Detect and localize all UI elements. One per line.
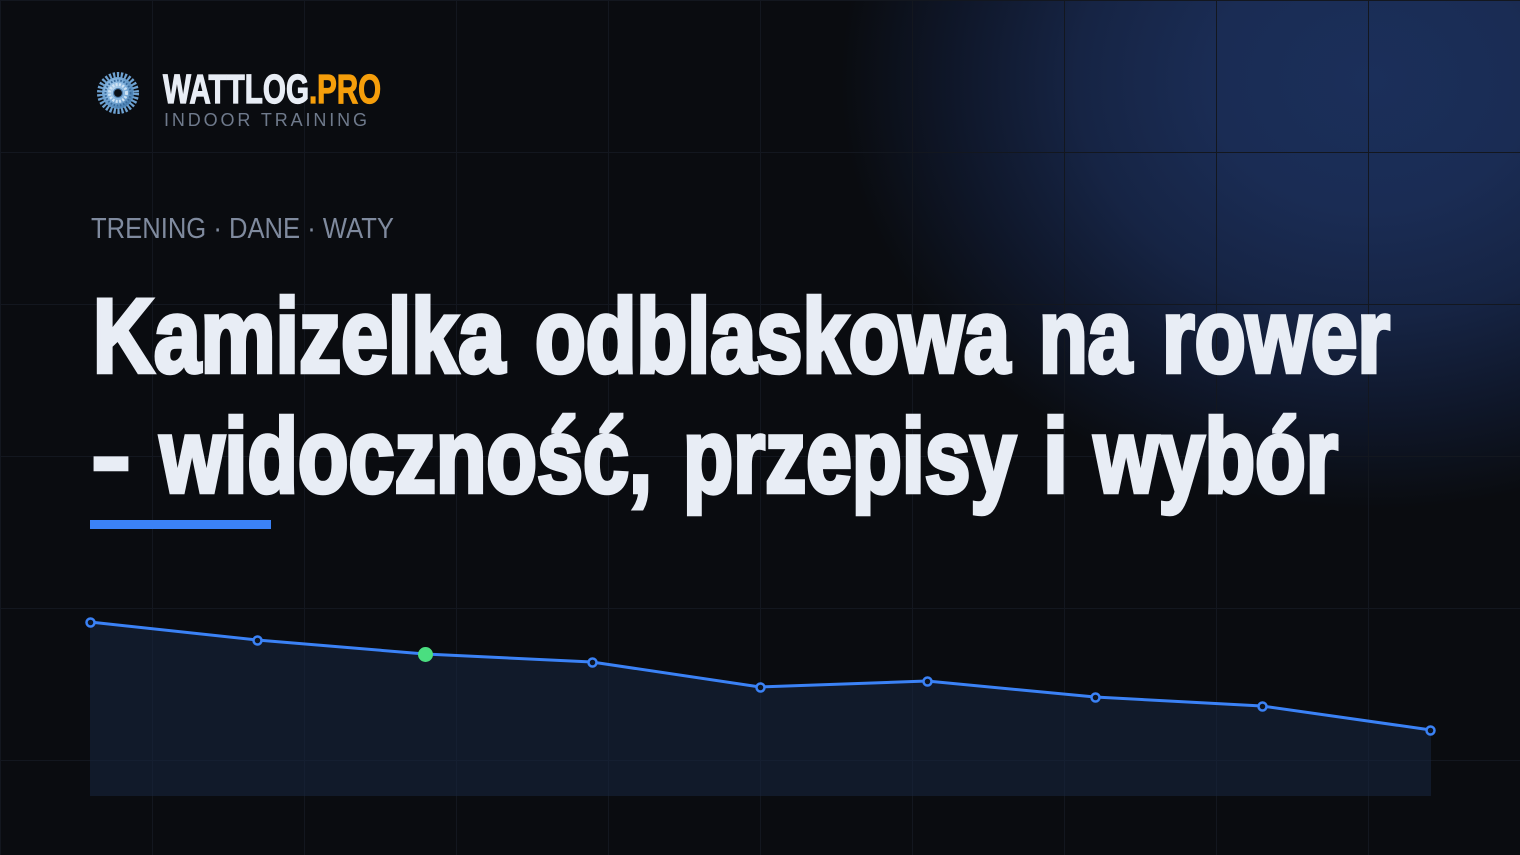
chart line — [90, 622, 1431, 730]
eyebrow: TRENING · DANE · WATY — [91, 213, 394, 245]
title: Kamizelka — [93, 278, 506, 395]
chart data points — [86, 618, 1434, 734]
icon: cassette gear — [100, 75, 136, 111]
title: wybór — [1093, 398, 1338, 515]
title: przepisy — [683, 398, 1016, 515]
title — [93, 278, 1390, 515]
title: – — [93, 398, 129, 515]
highlighted data point — [418, 647, 433, 662]
logo — [100, 66, 381, 130]
title: widoczność, — [159, 398, 652, 515]
title: rower — [1162, 278, 1390, 395]
brand name: WATTLOG — [163, 66, 309, 112]
title: i — [1043, 398, 1068, 515]
tagline: INDOOR TRAINING — [164, 110, 367, 130]
title accent underline — [90, 520, 271, 529]
chart area fill — [90, 622, 1431, 796]
line chart — [86, 618, 1434, 796]
title: na — [1039, 278, 1133, 395]
brand suffix: .PRO — [309, 66, 381, 112]
title: odblaskowa — [535, 278, 1011, 395]
